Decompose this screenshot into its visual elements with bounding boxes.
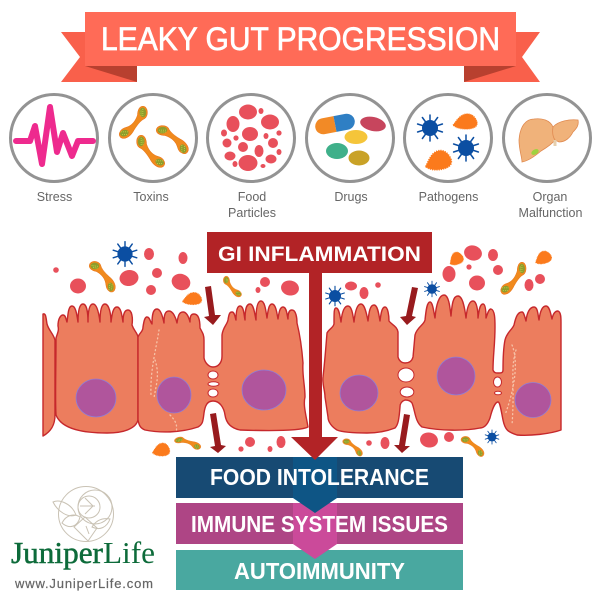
- right upper particle cluster: [326, 243, 553, 306]
- panel: pathogens factor: [404, 94, 492, 204]
- right cell nuclei: [340, 357, 551, 418]
- chevron: immune link: [293, 457, 337, 513]
- panel: organ malfunction factor: Malfunction: [519, 206, 583, 220]
- immune system issues bar: [176, 503, 463, 544]
- chevron: autoimmunity link: [293, 503, 337, 559]
- heading: GI inflammation: [207, 232, 432, 273]
- right lower particle cluster: [343, 430, 499, 457]
- arrow: bottom left out of gap: [210, 413, 226, 453]
- left cell nuclei: [76, 370, 286, 417]
- panel: toxins factor: Toxins: [133, 190, 169, 204]
- right leaky junction holes: [398, 368, 502, 397]
- title banner: LEAKY GUT PROGRESSION: [101, 21, 500, 57]
- large central arrow: [291, 270, 338, 460]
- title banner: [61, 12, 540, 82]
- food intolerance bar: [176, 457, 463, 498]
- left epithelial cell 1: [56, 304, 138, 433]
- panel: food particles factor: Particles: [228, 206, 276, 220]
- arrow: bottom right out of gap: [394, 414, 410, 453]
- logo: JuniperLife wordmark: JuniperLife: [11, 535, 155, 570]
- panel: organ malfunction factor: Organ: [533, 190, 567, 204]
- panel: drugs factor: [306, 94, 394, 204]
- left leaky junction holes: [208, 371, 219, 397]
- left cell organelle speckles: [151, 330, 177, 432]
- right epithelial cells with leaky junctions: [323, 295, 561, 435]
- panel: stress factor: [10, 94, 98, 204]
- label: immune system issues: IMMUNE SYSTEM ISSUES: [191, 511, 448, 537]
- left epithelial cells 2 and 3 with leaky junction: [138, 301, 308, 432]
- panel: stress factor: Stress: [37, 190, 72, 204]
- heading: GI inflammation: GI INFLAMMATION: [218, 243, 421, 266]
- label: autoimmunity: AUTOIMMUNITY: [234, 558, 405, 584]
- autoimmunity bar: [176, 550, 463, 590]
- left epithelial cell sliver: [43, 314, 55, 436]
- left upper particle cluster: [53, 242, 300, 305]
- arrow: top left into gap: [204, 286, 221, 325]
- right cell boundary and organelle speckles: [505, 345, 516, 425]
- logo: juniper fruit emblem: [53, 486, 114, 542]
- panel: pathogens factor: Pathogens: [419, 190, 478, 204]
- panel: toxins factor: [110, 94, 196, 204]
- panel: food particles factor: [208, 94, 294, 220]
- panel: drugs factor: Drugs: [334, 190, 368, 204]
- left lower particle cluster: [152, 432, 286, 456]
- logo: website address: www.JuniperLife.com: [14, 576, 153, 591]
- panel: organ malfunction factor: [504, 94, 590, 220]
- label: food intolerance: FOOD INTOLERANCE: [210, 464, 429, 490]
- arrow: top right into gap: [400, 287, 418, 325]
- panel: food particles factor: Food: [238, 190, 266, 204]
